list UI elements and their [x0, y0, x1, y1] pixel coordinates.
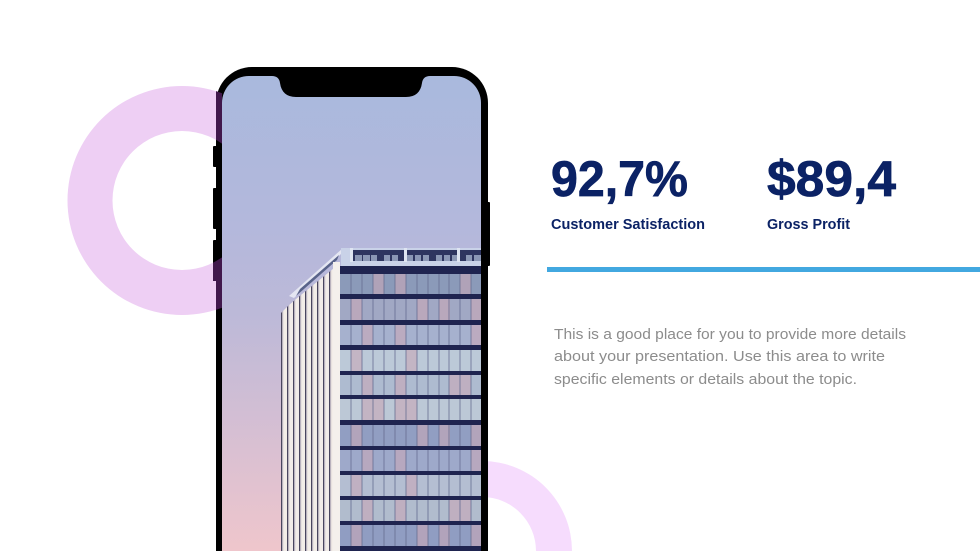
- building side facade: [281, 248, 346, 551]
- stat: customer satisfaction: [551, 151, 705, 233]
- phone screen with building photo: [222, 76, 481, 551]
- description text: This is a good place for you to provide more details: [554, 326, 906, 343]
- description text: [554, 326, 906, 388]
- phone side buttons: [213, 146, 490, 281]
- phone mockup: [213, 67, 490, 551]
- floor bands: [350, 294, 472, 551]
- description text: specific elements or details about the topic.: [554, 371, 857, 388]
- phone body: [216, 67, 488, 551]
- stat label: Customer Satisfaction: [551, 217, 705, 233]
- stat value: $89,4: [767, 151, 896, 207]
- stat value: 92,7%: [551, 151, 688, 207]
- description text: about your presentation. Use this area to write: [554, 348, 885, 365]
- building roof: [341, 248, 481, 267]
- ring showing through the bezel: [213, 91, 222, 310]
- accent divider bar: [547, 267, 980, 272]
- window mullions: [351, 274, 471, 551]
- decorative ring: upper left: [68, 86, 296, 315]
- stat label: Gross Profit: [767, 217, 850, 233]
- building front facade: [340, 266, 481, 551]
- stat: gross profit: [767, 151, 896, 233]
- pink-tinted windows: [351, 274, 481, 546]
- decorative ring: bottom centre: [392, 461, 572, 551]
